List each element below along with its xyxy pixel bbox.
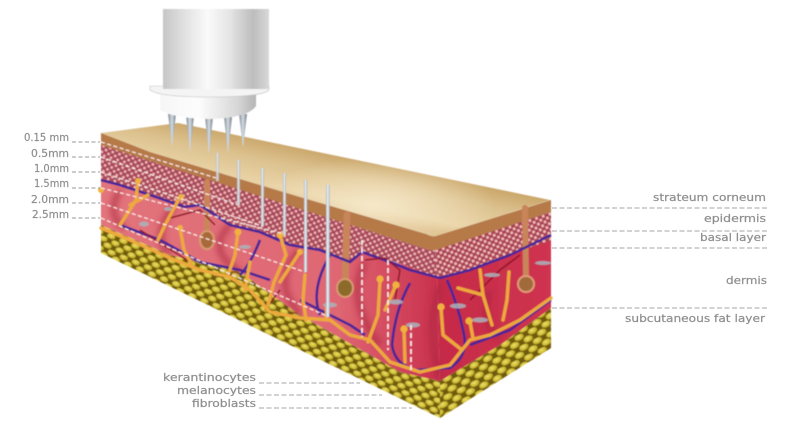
white depth dashed lines	[101, 142, 327, 316]
skin layer labels	[625, 192, 767, 325]
skin layer labels: basal layer	[700, 232, 767, 244]
panel: epidermis front face	[101, 143, 437, 277]
hair follicles	[200, 182, 534, 297]
purple blood vessels	[101, 180, 551, 370]
needle tips	[168, 114, 247, 155]
needle depth labels: 1.0mm	[34, 163, 69, 175]
needle depth labels: 2.5mm	[32, 209, 69, 221]
needles inside skin	[216, 153, 330, 317]
depth leader lines	[72, 142, 100, 218]
top surface highlight	[101, 123, 550, 236]
panel: epidermis right face	[435, 212, 551, 277]
needle depth labels	[24, 132, 69, 221]
skin layer labels: subcutaneous fat layer	[625, 313, 766, 325]
dermis folds	[114, 190, 500, 378]
cell type labels: kerantinocytes	[163, 372, 256, 384]
top surface of skin	[101, 123, 550, 236]
cell type labels: melanocytes	[177, 385, 256, 397]
cell marker vertical dashed lines	[362, 240, 411, 372]
panel: dermis right face	[437, 238, 551, 381]
red capillaries	[140, 210, 520, 310]
needle depth labels: 0.5mm	[31, 148, 69, 160]
skin layer labels: dermis	[726, 275, 767, 287]
device cylinder	[163, 9, 269, 89]
cell type labels	[163, 372, 256, 410]
device flange	[150, 86, 269, 97]
needle depth labels: 0.15 mm	[24, 132, 69, 144]
skin layer labels: epidermis	[704, 213, 766, 225]
skin block illustration	[98, 123, 551, 418]
needle depth labels: 2.0mm	[31, 194, 69, 206]
orange nerves	[101, 180, 551, 372]
stratum corneum rim	[101, 133, 551, 250]
layer leader lines	[552, 208, 769, 308]
cell leader lines	[259, 383, 412, 408]
skin layer labels: strateum corneum	[653, 192, 766, 204]
grey cell blobs	[139, 207, 551, 328]
panel: fat layer front face	[101, 225, 440, 418]
device lower collar	[160, 92, 256, 119]
panel: fat layer right face	[440, 308, 551, 418]
microneedling device	[150, 9, 269, 155]
panel: dermis front face	[101, 175, 440, 381]
cell type labels: fibroblasts	[192, 398, 256, 410]
nerve endings	[98, 178, 473, 333]
needle depth labels: 1.5mm	[34, 178, 69, 190]
